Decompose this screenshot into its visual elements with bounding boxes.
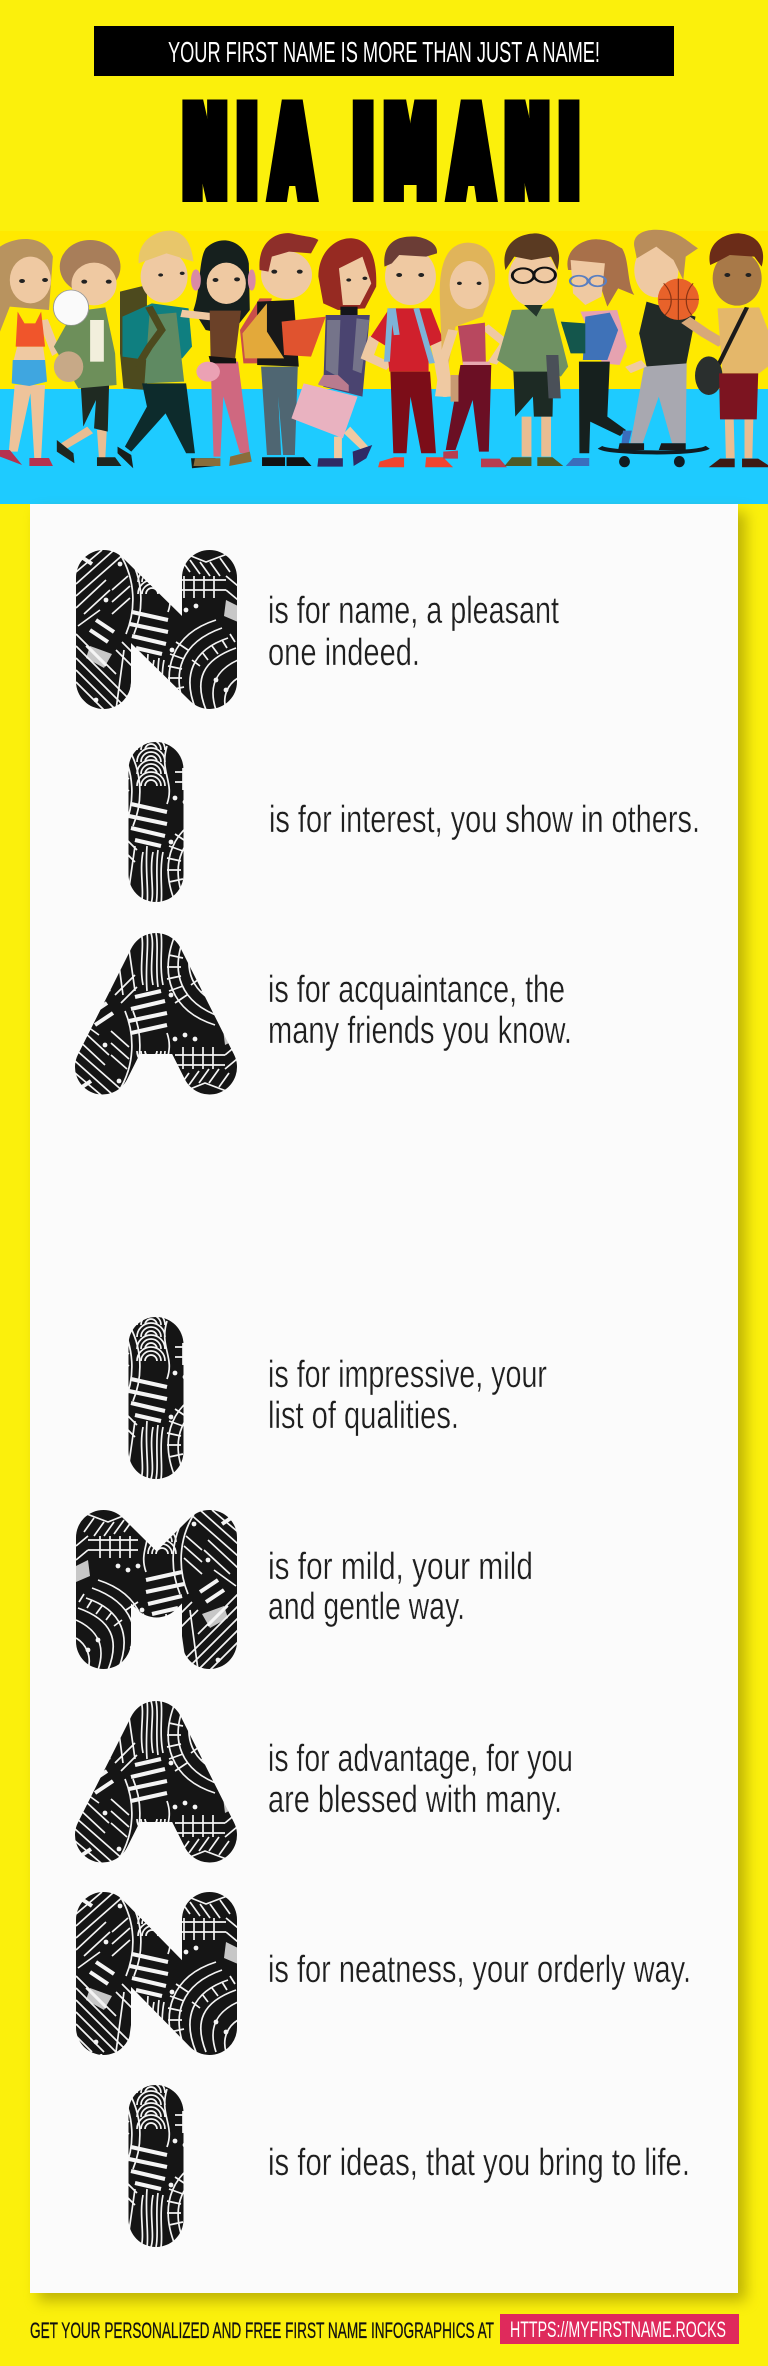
icon: patterned letter I bbox=[128, 1344, 184, 1452]
row: M is for mild: is for mild, your mild bbox=[268, 1546, 533, 1588]
row: A is for advantage: is for advantage, for you bbox=[268, 1738, 573, 1780]
row: I is for ideas bbox=[156, 2112, 690, 2220]
person: skateboarder bbox=[600, 230, 722, 467]
row: N is for name bbox=[104, 578, 559, 682]
person: boy with glasses bbox=[497, 233, 568, 466]
person: girl with volleyball bbox=[53, 240, 121, 466]
row: I is for impressive: is for impressive, your bbox=[268, 1354, 547, 1396]
row: N is for name: one indeed. bbox=[268, 632, 420, 674]
row: M is for mild bbox=[104, 1538, 533, 1642]
row: I is for impressive: list of qualities. bbox=[268, 1395, 459, 1437]
person: red-haired girl with pink bag bbox=[291, 238, 376, 467]
person: blonde girl bbox=[440, 243, 507, 467]
icon: patterned letter I bbox=[128, 2112, 184, 2220]
person: girl in orange top bbox=[0, 239, 81, 466]
icon: patterned letter M bbox=[104, 1538, 210, 1642]
row: A is for acquaintance: is for acquaintance, the bbox=[268, 969, 565, 1011]
icon: patterned letter N bbox=[104, 578, 210, 682]
header banner bbox=[94, 26, 674, 76]
row: A is for advantage bbox=[102, 1728, 573, 1835]
row: N is for name: is for name, a pleasant bbox=[268, 590, 559, 632]
row: I is for impressive bbox=[156, 1344, 547, 1452]
white content panel bbox=[30, 504, 746, 2301]
person: girl with glasses and ponytail bbox=[561, 239, 634, 466]
person: boy in red shirt bbox=[367, 236, 453, 467]
illustration: group of young people bbox=[0, 230, 768, 504]
footer call to action: GET YOUR PERSONALIZED AND FREE FIRST NAME INFOGRAPHICS AT bbox=[30, 2318, 494, 2343]
row: A is for advantage: are blessed with many. bbox=[268, 1779, 562, 1821]
row: A is for acquaintance bbox=[102, 960, 572, 1067]
row: M is for mild: and gentle way. bbox=[268, 1586, 465, 1628]
person: hiker with cap and backpack bbox=[118, 231, 216, 468]
person: boy with book bbox=[240, 233, 326, 466]
person: boy with basketball bbox=[658, 233, 768, 467]
row: N is for neatness bbox=[104, 1920, 691, 2028]
icon: patterned letter A bbox=[102, 960, 210, 1067]
icon: patterned letter I bbox=[128, 770, 184, 874]
icon: patterned letter N bbox=[104, 1920, 210, 2028]
icon: patterned letter A bbox=[102, 1728, 210, 1835]
person: girl with headphones bbox=[181, 240, 256, 466]
row: A is for acquaintance: many friends you know. bbox=[268, 1010, 572, 1052]
row: I is for interest bbox=[156, 770, 700, 874]
title: NIA IMANI bbox=[183, 83, 579, 224]
